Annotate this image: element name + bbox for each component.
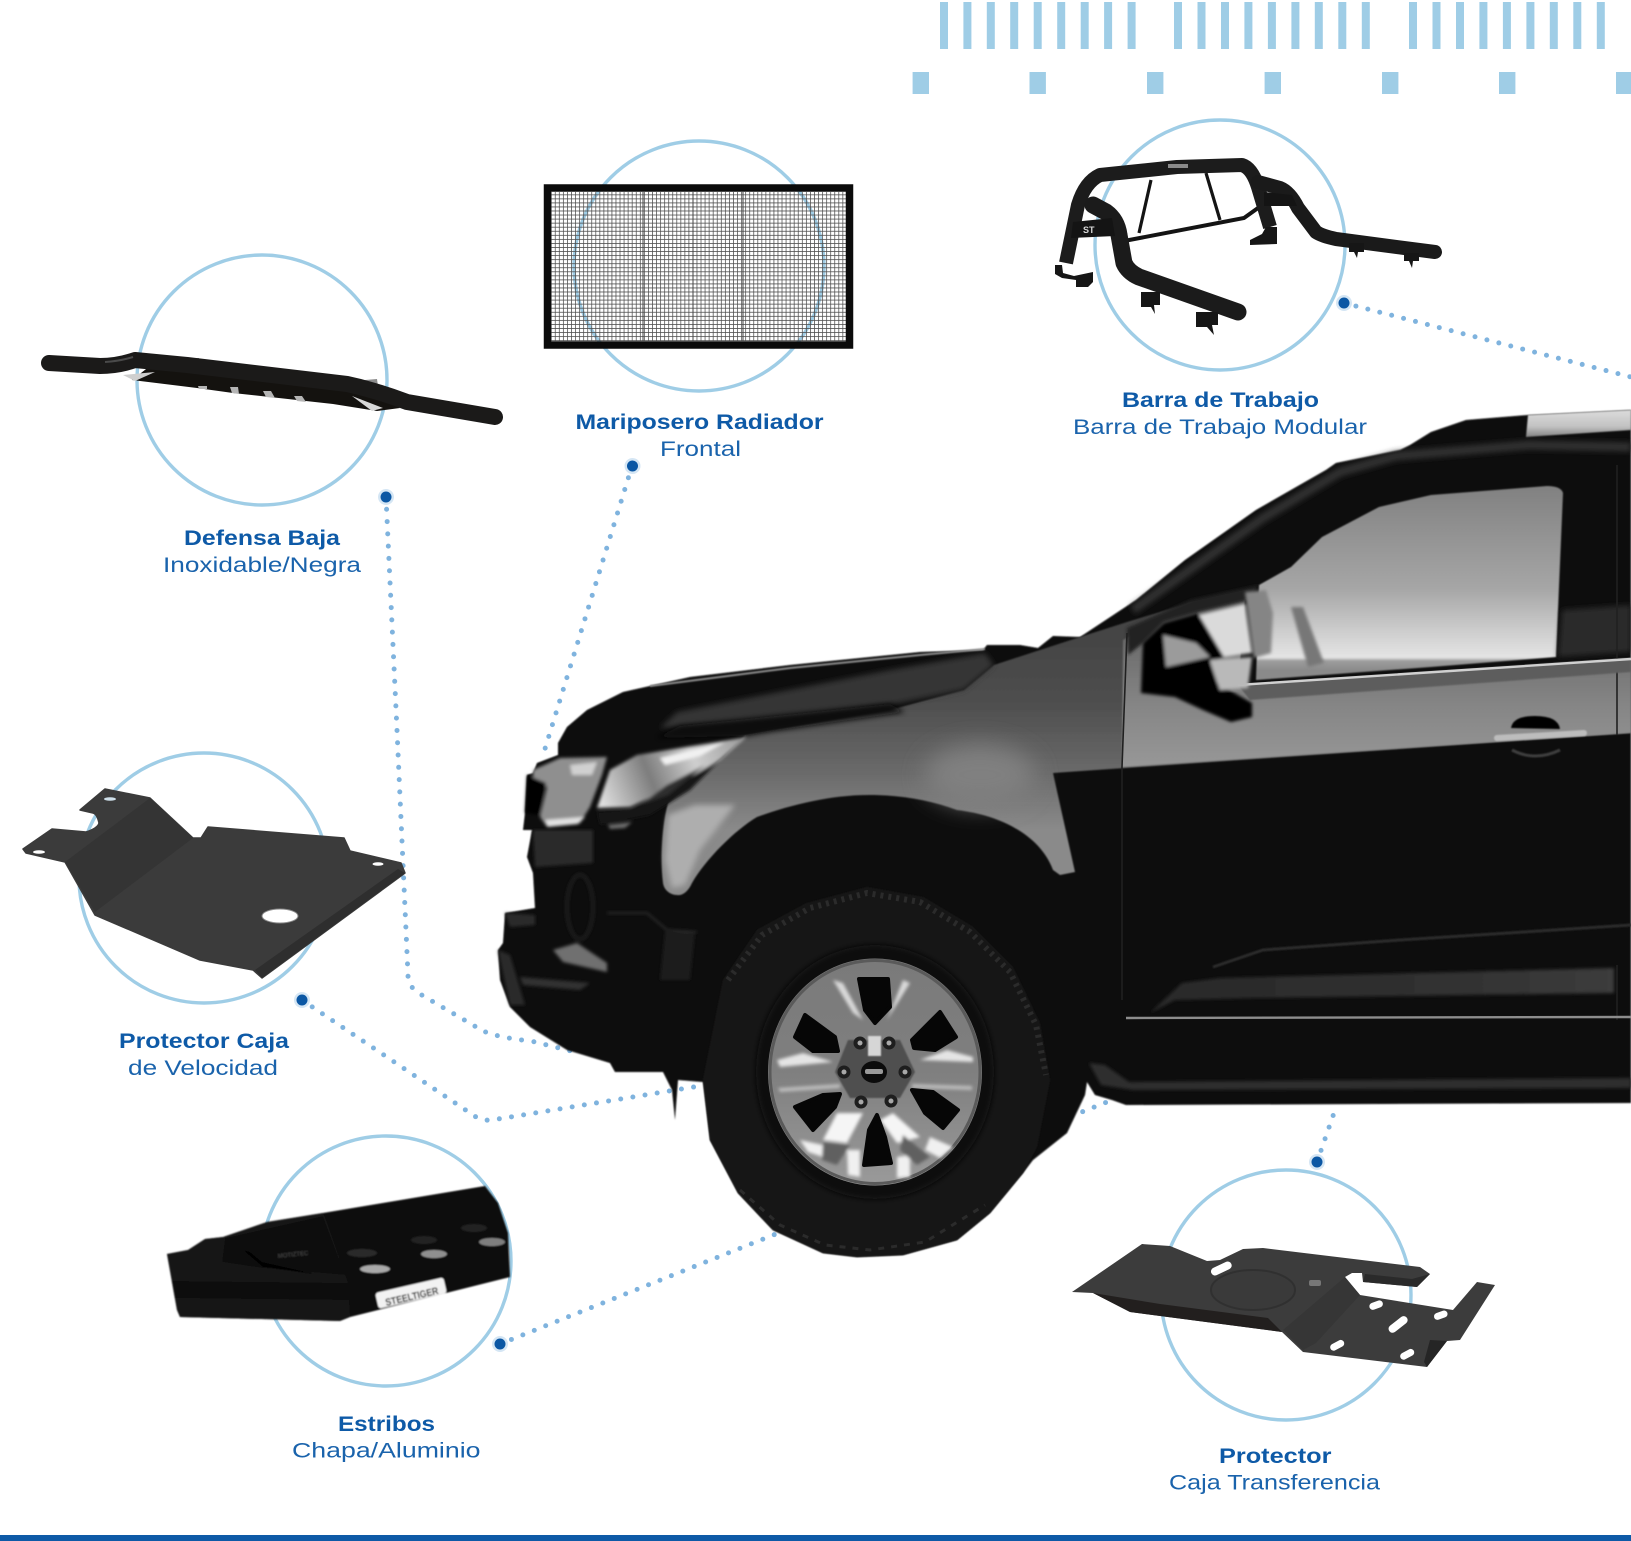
title: Mariposero Radiador: [576, 411, 824, 434]
side crease: [1213, 925, 1631, 967]
hood black streak: [655, 704, 905, 738]
wheel well shadow: [756, 945, 994, 1199]
door panel: [1122, 595, 1631, 767]
subtitle: Inoxidable/Negra: [163, 553, 361, 577]
truck silhouette: [498, 410, 1631, 1257]
part: roll bar: ST: [1083, 225, 1095, 235]
part: skid plate: [23, 789, 405, 978]
marker dot: [1309, 1154, 1325, 1170]
hood surface: [660, 653, 994, 728]
b pillar: [1558, 605, 1631, 657]
marker dot: [378, 489, 394, 505]
chrome belt line: [1238, 659, 1631, 685]
truck: [498, 410, 1631, 1257]
title: Protector: [1219, 1445, 1332, 1468]
window ghost reflection: [1291, 607, 1324, 667]
part: bumper tube: [49, 357, 495, 417]
part: running board: STEELTIGER: [384, 1286, 440, 1309]
fender highlight: [665, 805, 735, 888]
part: running board: MOTIZTEC: [278, 1251, 309, 1260]
circle: [1161, 1170, 1411, 1420]
marker dot: [294, 992, 310, 1008]
barcode stripes decoration: [913, 2, 1631, 94]
subtitle: Barra de Trabajo Modular: [1073, 415, 1367, 439]
circle: [1095, 120, 1345, 370]
a pillar dark zone: [1127, 585, 1259, 655]
circle: [137, 255, 387, 505]
part: transfer skid plate: [1072, 1244, 1495, 1367]
door handle: [1497, 716, 1584, 756]
marker dot: [624, 458, 640, 474]
marker dot: [1336, 295, 1352, 311]
subtitle: Frontal: [660, 437, 741, 461]
subtitle: Caja Transferencia: [1169, 1470, 1380, 1494]
hood edge highlight: [650, 649, 985, 686]
circle: [574, 141, 824, 391]
subtitle: Chapa/Aluminio: [292, 1438, 481, 1462]
panel: estribos: [167, 1136, 511, 1462]
marker dot: [492, 1336, 508, 1352]
title: Barra de Trabajo: [1122, 389, 1319, 412]
panel: barra de trabajo: [1055, 120, 1435, 439]
part: roll bar: [1055, 164, 1435, 335]
door seam lines: [1122, 465, 1617, 1020]
circle: [79, 753, 329, 1003]
bumper details: [498, 830, 697, 1005]
dotted connector lines: [302, 303, 1631, 1344]
panel: mariposero radiador: [548, 141, 850, 474]
roof dark band: [1133, 445, 1631, 610]
window: [1256, 486, 1563, 680]
panel: defensa baja: [49, 255, 495, 577]
wheel rim: [768, 958, 982, 1186]
panel: protector caja de velocidad: [23, 753, 405, 1080]
mirror: [1141, 590, 1273, 722]
part: radiator mesh: [548, 188, 850, 345]
fender light patch: [925, 745, 1035, 805]
bottom band: [0, 1535, 1631, 1541]
part: running board: [167, 1186, 510, 1321]
title: Protector Caja: [119, 1030, 289, 1053]
headlight: [525, 737, 747, 829]
title: Defensa Baja: [184, 527, 340, 550]
body upper panels: [662, 595, 1631, 895]
side panel highlight: [1150, 968, 1614, 1013]
spoke highlights: [777, 980, 973, 1178]
subtitle: de Velocidad: [128, 1056, 278, 1080]
panel: protector caja transferencia: [1072, 1154, 1495, 1494]
tyre: [703, 887, 1050, 1257]
circle: [261, 1136, 511, 1386]
belt band: [1238, 659, 1631, 700]
rocker chrome line: [1126, 1017, 1631, 1018]
running board highlight: [1089, 1063, 1631, 1090]
roof silver rail: [1526, 410, 1631, 437]
title: Estribos: [338, 1413, 435, 1436]
